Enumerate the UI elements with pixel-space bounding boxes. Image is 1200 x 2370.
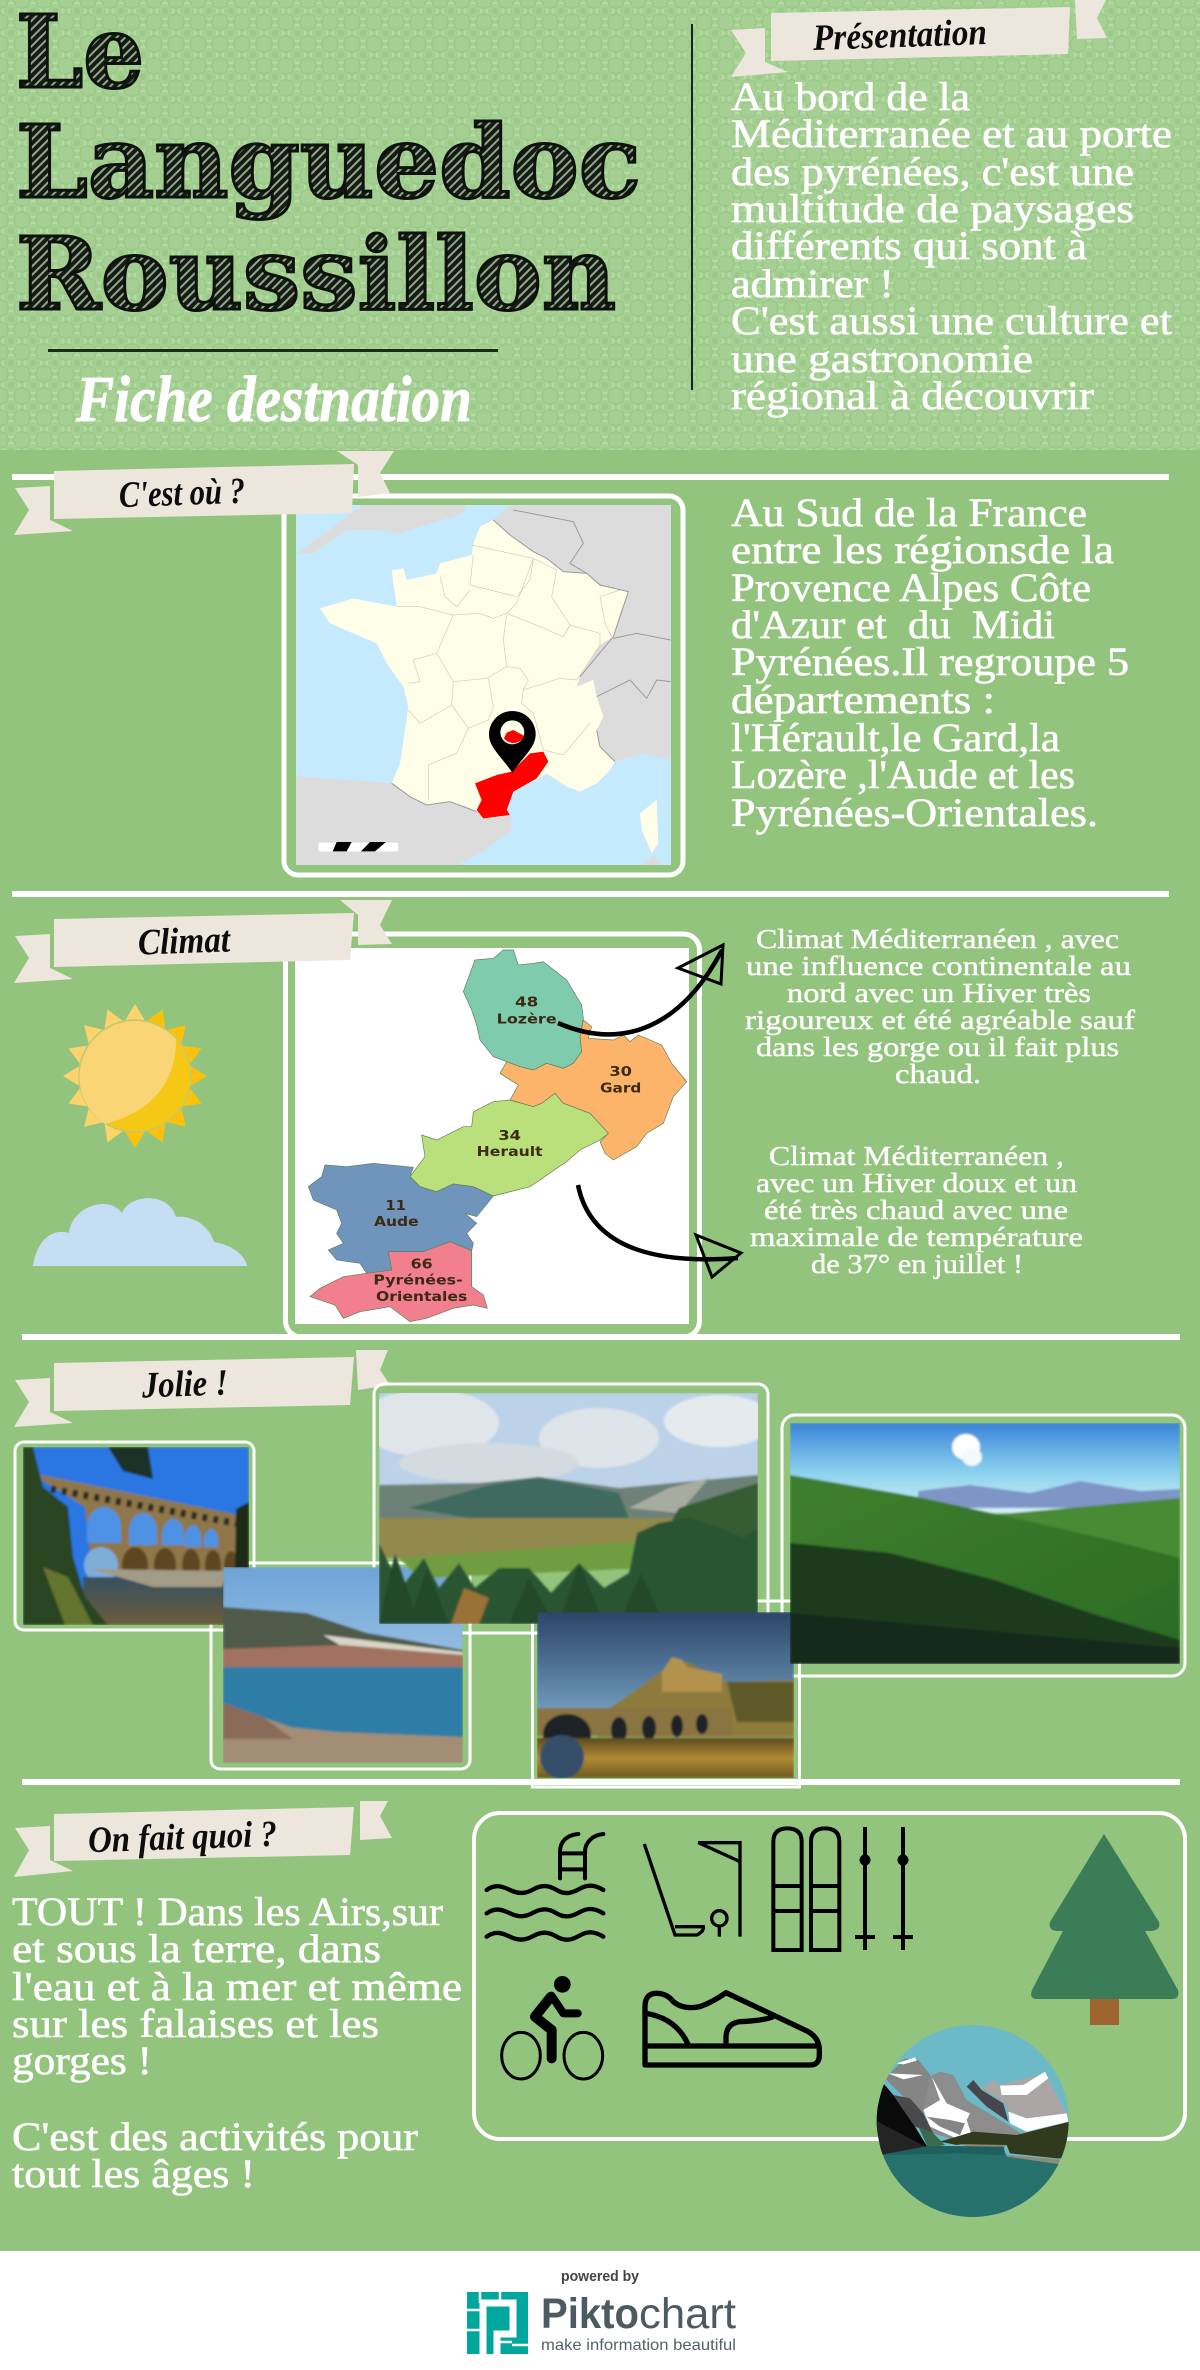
text: présentation: admirer ! xyxy=(731,261,894,306)
text: activités: gorges ! xyxy=(12,2038,152,2083)
text: activités: TOUT ! Dans les Airs,sur xyxy=(12,1889,443,1934)
banner: c'est où: C'est où ? xyxy=(118,471,246,516)
text: activités: sur les falaises et les xyxy=(12,2001,379,2046)
text: présentation: Au bord de la xyxy=(731,74,970,119)
photo: Béziers xyxy=(537,1612,794,1778)
logo mark xyxy=(467,2292,528,2354)
regional map: Herault xyxy=(477,1144,543,1160)
text: localisation: Provence Alpes Côte xyxy=(731,565,1091,610)
regional map xyxy=(286,934,700,1337)
regional map: Pyrénées- xyxy=(373,1272,463,1288)
text: activités: l'eau et à la mer et même xyxy=(12,1964,462,2009)
text: présentation: différents qui sont à xyxy=(731,223,1087,268)
vertical divider xyxy=(691,24,693,390)
title xyxy=(16,0,641,333)
title: Languedoc xyxy=(16,103,641,221)
banner: climat xyxy=(14,900,392,983)
text: présentation: Méditerranée et au porte xyxy=(731,111,1172,156)
icon: cloud xyxy=(33,1198,247,1266)
panel: climat xyxy=(14,900,1135,1337)
icon: sun xyxy=(63,1004,207,1148)
text: localisation: départements : xyxy=(731,677,995,722)
text: présentation xyxy=(731,74,1172,418)
map of France xyxy=(284,496,683,875)
text: localisation: Pyrénées-Orientales. xyxy=(731,790,1098,835)
footer: piktochart xyxy=(467,2268,736,2354)
banner: jolie xyxy=(14,1350,390,1427)
arrow: north climate xyxy=(558,945,723,1034)
powered by: powered by xyxy=(561,2268,640,2285)
icon: shoe xyxy=(645,1993,819,2065)
tagline: make information beautiful xyxy=(541,2337,736,2354)
banner: climat: Climat xyxy=(137,919,232,964)
icon: golf xyxy=(644,1843,740,1937)
panel: on fait quoi xyxy=(12,1801,1185,2220)
regional map: 66 xyxy=(411,1256,433,1272)
text: présentation: C'est aussi une culture et xyxy=(731,298,1172,343)
regional map: 48 xyxy=(515,995,538,1011)
text: présentation: une gastronomie xyxy=(731,336,1033,381)
panel: jolie xyxy=(14,1350,1185,1787)
text: climat nord: nord avec un Hiver très xyxy=(787,978,1091,1008)
icon: swimming xyxy=(487,1834,603,1940)
regional map: Gard xyxy=(600,1080,641,1096)
footer background xyxy=(0,2251,1200,2370)
text: climat nord: chaud. xyxy=(895,1059,981,1089)
banner: Présentation: Présentation xyxy=(811,12,988,59)
text: climat sud: de 37° en juillet ! xyxy=(811,1249,1023,1279)
regional map: 34 xyxy=(498,1128,521,1144)
text: climat nord: Climat Méditerranéen , avec xyxy=(756,924,1119,954)
text: climat nord: rigoureux et été agréable sauf xyxy=(745,1005,1135,1035)
text: climat nord: dans les gorge ou il fait plus xyxy=(756,1032,1119,1062)
regional map: 30 xyxy=(609,1064,632,1080)
text: climat sud xyxy=(750,1141,1083,1279)
title: Roussillon xyxy=(16,215,616,333)
text: localisation: l'Hérault,le Gard,la xyxy=(731,715,1060,760)
text: climat sud: maximale de température xyxy=(750,1222,1083,1252)
banner: on fait quoi: On fait quoi ? xyxy=(87,1814,278,1861)
icon: fir tree xyxy=(1031,1834,1178,2025)
text: localisation: Lozère ,l'Aude et les xyxy=(731,752,1075,797)
text: présentation: multitude de paysages xyxy=(731,186,1134,231)
text: climat sud: avec un Hiver doux et un xyxy=(756,1168,1078,1198)
wordmark: Pikto xyxy=(541,2290,639,2338)
subtitle: Fiche destnation xyxy=(75,363,472,436)
text: climat sud: Climat Méditerranéen , xyxy=(769,1141,1064,1171)
text: climat sud: été très chaud avec une xyxy=(764,1195,1068,1225)
text: localisation: Au Sud de la France xyxy=(731,490,1087,535)
text: localisation xyxy=(731,490,1129,835)
footer: piktochart: chart xyxy=(639,2290,736,2338)
icon: mountain lake xyxy=(873,2023,1073,2220)
banner: c'est où xyxy=(14,451,394,535)
regional map: Orientales xyxy=(376,1289,467,1305)
text: présentation: des pyrénées, c'est une xyxy=(731,149,1134,194)
photo: pont du Gard xyxy=(23,1447,249,1625)
text: activités xyxy=(12,1889,462,2196)
icon: skis xyxy=(773,1828,839,1950)
text: activités: tout les âges ! xyxy=(12,2151,255,2196)
regional map: Lozère xyxy=(497,1011,557,1027)
photo: côte xyxy=(223,1567,463,1763)
panel: c'est où xyxy=(14,451,1129,875)
regional map: 11 xyxy=(385,1198,406,1214)
activities frame xyxy=(474,1813,1185,2139)
text: localisation: Pyrénées.Il regroupe 5 xyxy=(731,639,1129,684)
text: climat nord xyxy=(745,924,1135,1089)
banner: jolie: Jolie ! xyxy=(140,1362,229,1406)
text: présentation: régional à découvrir xyxy=(731,373,1094,418)
text: localisation: d'Azur et du Midi xyxy=(731,602,1055,647)
text: climat nord: une influence continentale au xyxy=(746,951,1132,981)
banner: on fait quoi xyxy=(14,1801,392,1877)
text: activités: C'est des activités pour xyxy=(12,2114,418,2159)
header panel xyxy=(0,0,1200,450)
arrow: south climate xyxy=(578,1185,741,1277)
icon: ski poles xyxy=(855,1827,913,1950)
banner: Présentation xyxy=(731,0,1107,77)
text: localisation: entre les régionsde la xyxy=(731,527,1114,572)
text: activités: et sous la terre, dans xyxy=(12,1926,381,1971)
photo: causses xyxy=(379,1393,758,1624)
regional map: Aude xyxy=(374,1214,419,1230)
photo frames xyxy=(15,1384,1185,1787)
photo: montagne xyxy=(790,1423,1180,1664)
icon: cyclist xyxy=(502,1976,603,2079)
